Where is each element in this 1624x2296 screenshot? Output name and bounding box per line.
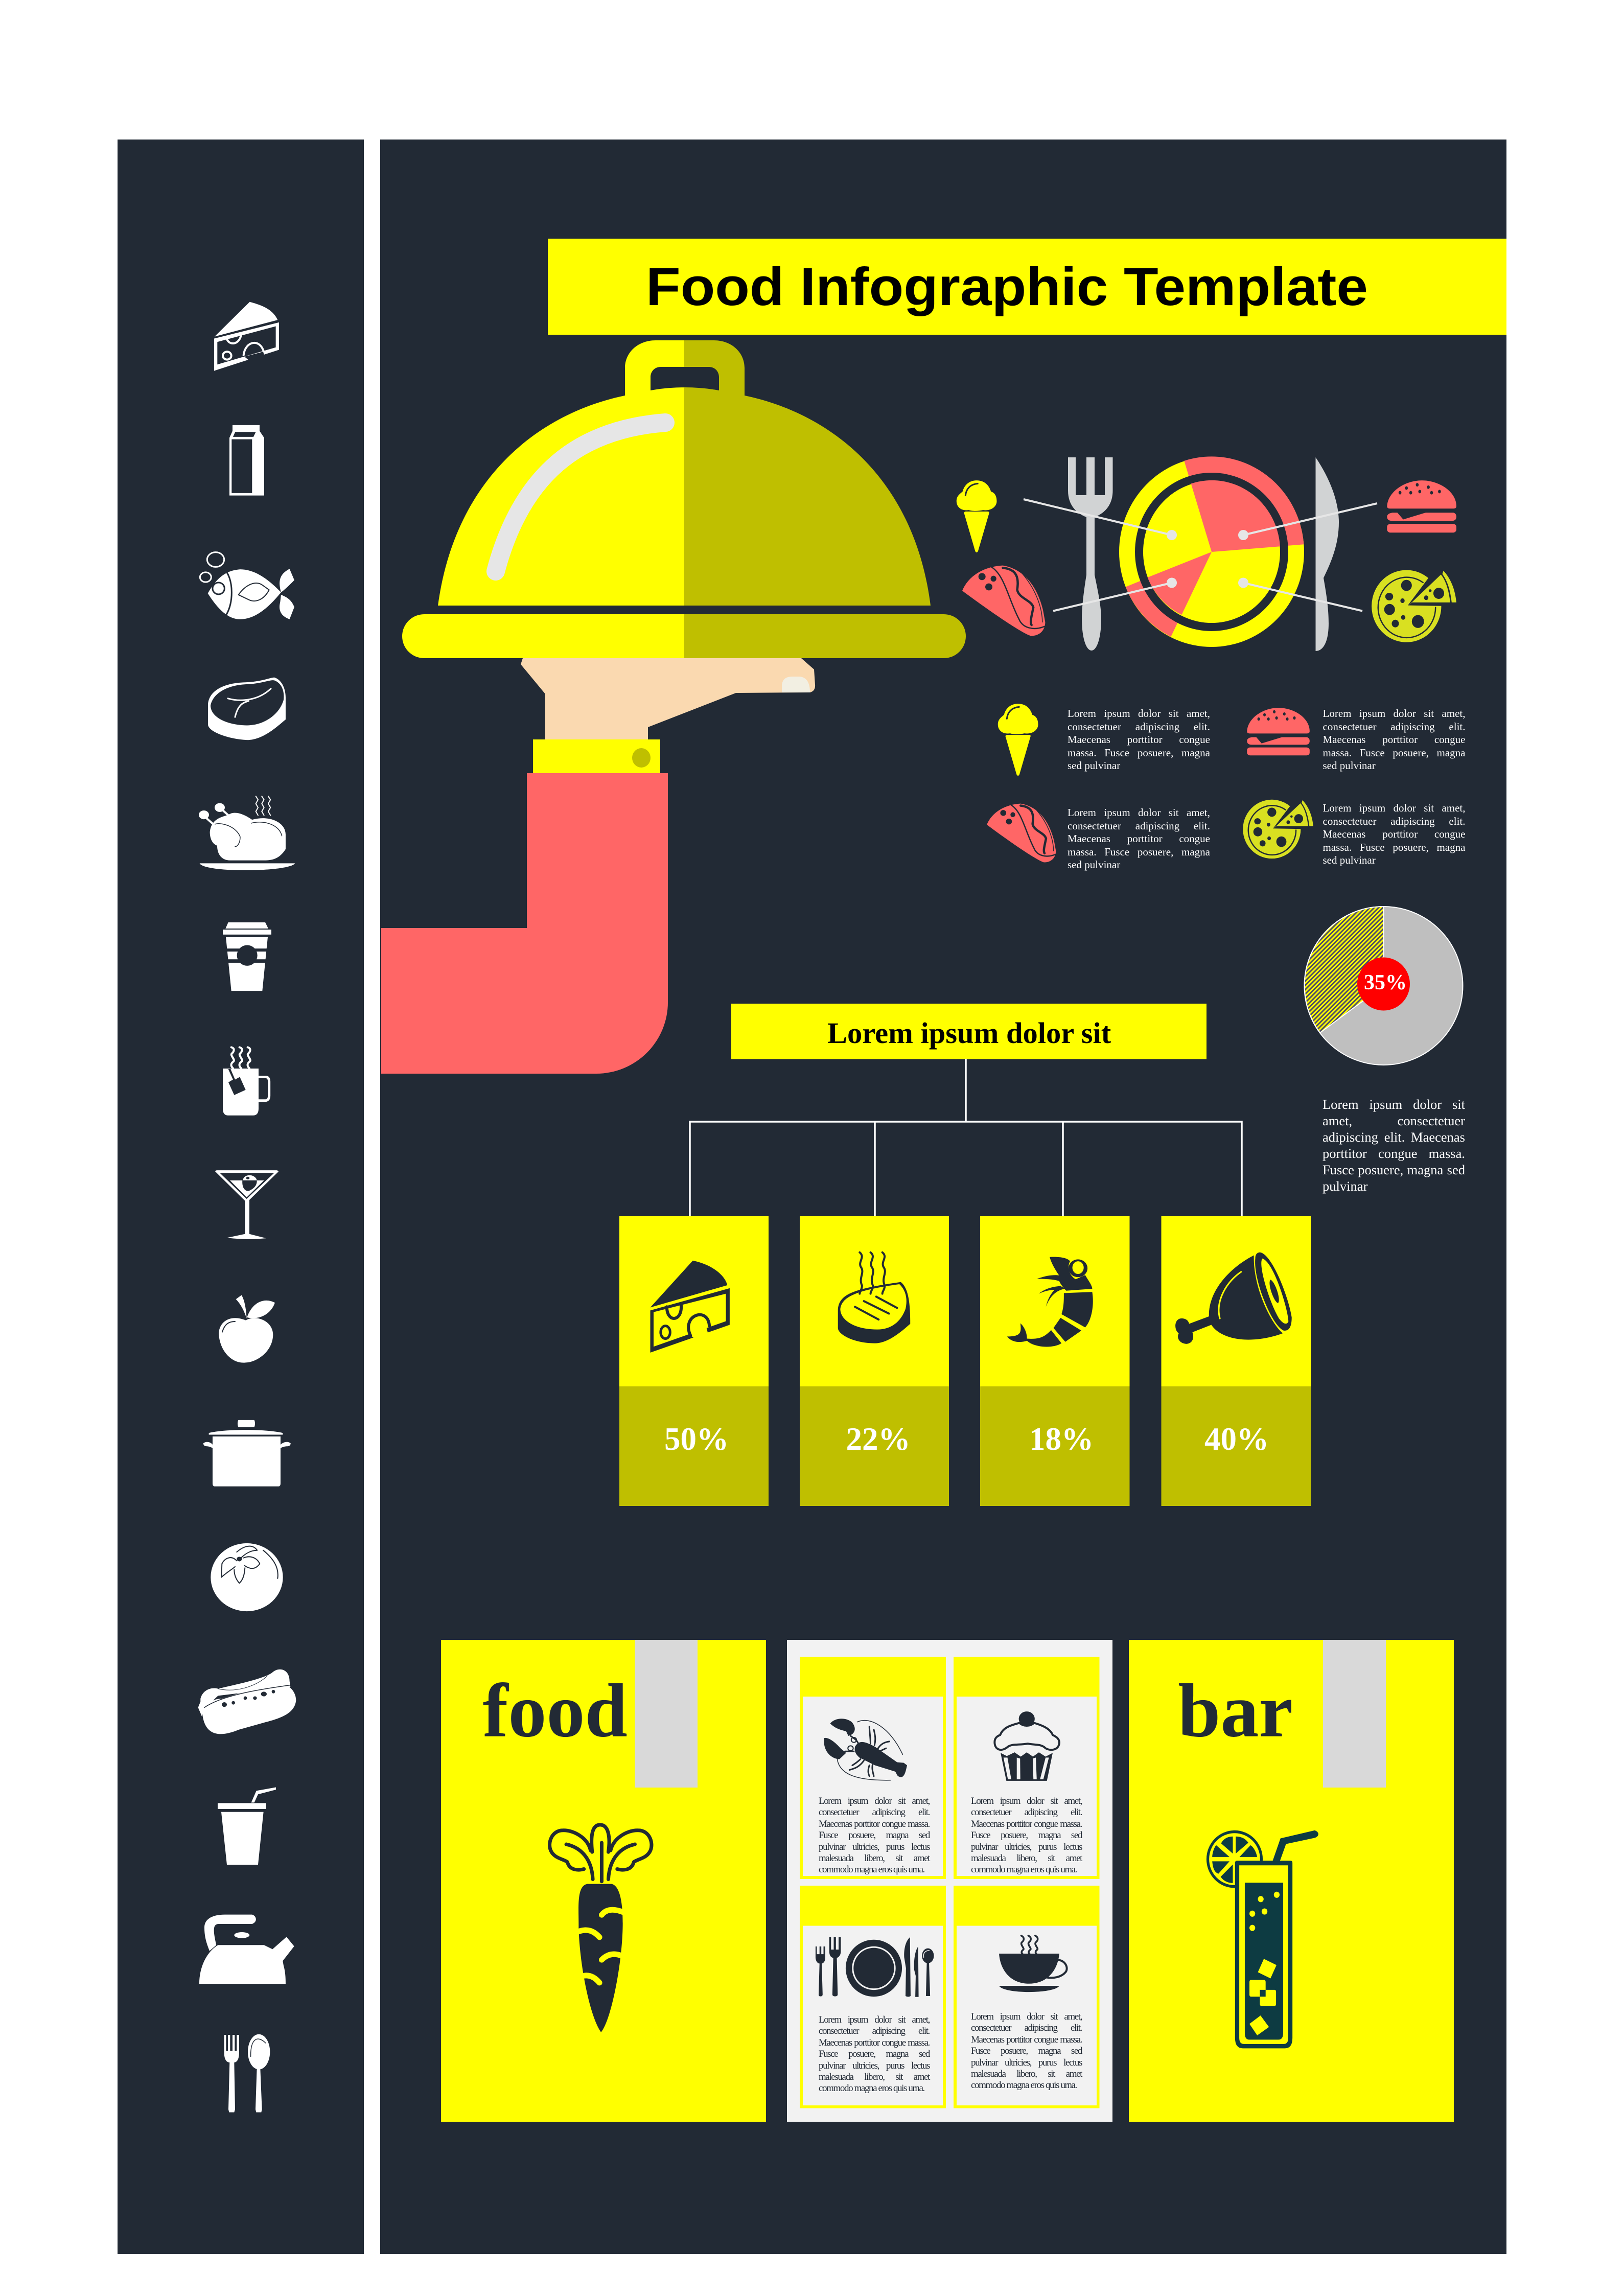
text: pie chart description: Lorem ipsum dolor sit — [1323, 1097, 1465, 1112]
text: menu card 4: consectetuer adipiscing elit. — [971, 2023, 1082, 2033]
icon: carrot — [550, 1825, 652, 2032]
text: menu card 4: pulvinar ultricies, purus lectus — [971, 2057, 1082, 2068]
text: menu card 4 — [971, 2011, 1082, 2091]
text: ice cream description — [1068, 707, 1210, 772]
pointer lines — [1024, 499, 1377, 611]
text: pie chart description: amet, consectetuer — [1323, 1113, 1465, 1128]
text: menu card 2: Lorem ipsum dolor sit amet, — [971, 1796, 1082, 1806]
text: pizza description: consectetuer adipiscing elit. — [1323, 815, 1466, 827]
icon: cupcake — [994, 1711, 1059, 1781]
text: menu card 4: commodo magna eros quis urna. — [971, 2080, 1077, 2091]
stat card: cheese 50% — [619, 1216, 769, 1506]
text: menu card 4: malesuada libero, sit amet — [971, 2069, 1082, 2079]
text: burger description: Maecenas porttitor congue — [1323, 733, 1466, 746]
fork — [1068, 457, 1113, 651]
text: menu card 2: consectetuer adipiscing elit. — [971, 1807, 1082, 1818]
icon: tea mug — [223, 1047, 269, 1116]
text: pizza description: Lorem ipsum dolor sit amet, — [1323, 802, 1466, 814]
text: menu card 1: malesuada libero, sit amet — [819, 1853, 930, 1864]
text: taco description — [1068, 806, 1210, 871]
knife — [1315, 457, 1339, 651]
stat card: shrimp 18%: 18% — [1029, 1421, 1094, 1457]
stat card: steak 22%: 22% — [846, 1421, 911, 1457]
icon: apple — [219, 1295, 275, 1363]
banner heading: Lorem ipsum dolor sit — [827, 1016, 1111, 1050]
icon: drink cup with straw — [218, 1787, 276, 1865]
text: pizza description: massa. Fusce posuere, magna — [1323, 841, 1466, 853]
panel: bar menu cover: bar — [1178, 1668, 1293, 1753]
panel: food menu cover — [441, 1640, 766, 2122]
sleeve — [381, 773, 668, 1074]
icon: lobster — [824, 1719, 907, 1780]
text: menu card 2: Maecenas porttitor congue massa. — [971, 1819, 1082, 1829]
text: burger description — [1323, 707, 1466, 772]
cloche dome — [438, 340, 931, 606]
icon: cheese — [650, 1261, 730, 1353]
text: menu card 2: pulvinar ultricies, purus lectus — [971, 1842, 1082, 1852]
legend icon: burger — [1247, 708, 1310, 755]
cuff — [533, 739, 660, 773]
title bar — [548, 239, 1506, 335]
text: pizza description: sed pulvinar — [1323, 854, 1376, 866]
icon: martini — [215, 1170, 279, 1239]
text: pie chart description: porttitor congue massa. — [1323, 1146, 1465, 1161]
icon: kettle — [199, 1915, 294, 1984]
icon: soup cup — [999, 1936, 1067, 1992]
icon: fish — [200, 552, 294, 619]
tree connector lines — [690, 1059, 1242, 1216]
text: burger description: massa. Fusce posuere, magna — [1323, 746, 1466, 758]
text: menu card 1: commodo magna eros quis urna. — [819, 1864, 924, 1875]
text: menu card 3: Maecenas porttitor congue massa. — [819, 2037, 930, 2048]
icon: milk carton — [229, 425, 264, 496]
text: menu card 2: commodo magna eros quis urna. — [971, 1864, 1077, 1875]
icon: cooking pot — [203, 1420, 291, 1487]
text: menu card 3 — [819, 2014, 930, 2094]
icon: fork and spoon — [224, 2034, 270, 2112]
text: ice cream description: Lorem ipsum dolor sit amet, — [1068, 707, 1210, 720]
stat card: cheese 50%: 50% — [664, 1421, 729, 1457]
text: taco description: consectetuer adipiscing elit. — [1068, 820, 1210, 832]
plate diagram — [957, 456, 1377, 651]
text: menu card 1: pulvinar ultricies, purus lectus — [819, 1842, 930, 1852]
text: menu card 1: Maecenas porttitor congue massa. — [819, 1819, 930, 1829]
plate pie chart — [1143, 480, 1280, 623]
dome highlight — [496, 423, 665, 571]
stat card: ham 40% — [1161, 1216, 1311, 1506]
text: menu card 3: consectetuer adipiscing elit. — [819, 2026, 930, 2036]
text: ice cream description: massa. Fusce posuere, magna — [1068, 746, 1210, 758]
text: menu card 1: consectetuer adipiscing elit. — [819, 1807, 930, 1818]
text: pie chart description: adipiscing elit. Maecenas — [1323, 1129, 1465, 1145]
text: menu card 1: Lorem ipsum dolor sit amet, — [819, 1796, 930, 1806]
icon: coffee cup — [223, 922, 271, 991]
panel: food menu cover: food — [482, 1668, 628, 1753]
text: burger description: Lorem ipsum dolor sit amet, — [1323, 707, 1466, 720]
text: ice cream description: consectetuer adipiscing elit. — [1068, 721, 1210, 733]
text: menu card 4: Lorem ipsum dolor sit amet, — [971, 2011, 1082, 2022]
text: menu card 3: malesuada libero, sit amet — [819, 2072, 930, 2082]
cloche tray — [402, 614, 966, 658]
icon: place setting — [816, 1937, 934, 1997]
stat card: steak 22% — [800, 1216, 949, 1506]
stat card: shrimp 18% — [980, 1216, 1129, 1506]
icon: steak with steam — [838, 1253, 910, 1343]
panel: menu interior — [787, 1640, 1112, 2122]
icon: burger — [1387, 480, 1456, 532]
icon: ice cream — [957, 480, 996, 552]
text: menu card 2: malesuada libero, sit amet — [971, 1853, 1082, 1864]
icon: steak — [208, 678, 286, 740]
text: burger description: sed pulvinar — [1323, 759, 1376, 772]
plate rim — [1119, 456, 1304, 647]
icon: cocktail glass — [1207, 1830, 1318, 2048]
panel: bar menu cover — [1129, 1640, 1454, 2122]
text: burger description: consectetuer adipiscing elit. — [1323, 721, 1466, 733]
banner heading — [731, 1004, 1207, 1059]
text: taco description: sed pulvinar — [1068, 859, 1120, 871]
hand — [521, 658, 815, 739]
text: menu card 2 — [971, 1796, 1082, 1875]
icon: shrimp — [1007, 1257, 1093, 1347]
icon: tomato — [211, 1543, 283, 1611]
stat card: ham 40%: 40% — [1204, 1421, 1269, 1457]
legend icon: ice cream — [998, 704, 1038, 776]
text: ice cream description: Maecenas porttitor congue — [1068, 733, 1210, 746]
menu card 4 — [954, 1886, 1100, 2108]
icon: cheese — [214, 302, 279, 371]
illustration: waiter's arm holding cloche — [381, 340, 966, 1074]
icon: pizza — [1372, 570, 1456, 642]
text: taco description: Lorem ipsum dolor sit amet, — [1068, 806, 1210, 819]
legend icon: taco — [987, 804, 1056, 862]
text: menu card 1: Fusce posuere, magna sed — [819, 1830, 930, 1841]
icon: hot dog — [198, 1669, 296, 1734]
text: pizza description — [1323, 802, 1466, 866]
text: menu card 1 — [819, 1796, 930, 1875]
text: pizza description: Maecenas porttitor congue — [1323, 828, 1466, 840]
icon: taco — [962, 566, 1045, 636]
text: menu card 4: Maecenas porttitor congue massa. — [971, 2034, 1082, 2045]
text: ice cream description: sed pulvinar — [1068, 759, 1120, 772]
pie chart 35%: 35% — [1364, 971, 1407, 994]
legend icon: pizza — [1243, 800, 1313, 859]
menu card 1 — [800, 1657, 946, 1879]
menu card 2 — [954, 1657, 1100, 1879]
text: pie chart description: pulvinar — [1323, 1178, 1367, 1194]
icon: roast chicken — [199, 796, 295, 870]
text: menu card 4: Fusce posuere, magna sed — [971, 2046, 1082, 2056]
text: menu card 2: Fusce posuere, magna sed — [971, 1830, 1082, 1841]
panel: main dark background — [380, 140, 1506, 2254]
text: pie chart description: Fusce posuere, magna sed — [1323, 1162, 1465, 1177]
panel: sidebar with food icons — [118, 140, 364, 2254]
menu card 3 — [800, 1886, 946, 2108]
text: menu card 3: commodo magna eros quis urna. — [819, 2083, 924, 2094]
text: menu card 3: pulvinar ultricies, purus lectus — [819, 2060, 930, 2071]
pie chart 35% — [1304, 907, 1463, 1065]
text: taco description: Maecenas porttitor congue — [1068, 832, 1210, 845]
title: Food Infographic Template — [646, 257, 1368, 317]
text: menu card 3: Lorem ipsum dolor sit amet, — [819, 2014, 930, 2025]
text: menu card 3: Fusce posuere, magna sed — [819, 2049, 930, 2059]
icon: ham — [1175, 1253, 1292, 1344]
text: taco description: massa. Fusce posuere, magna — [1068, 845, 1210, 857]
text: pie chart description — [1323, 1097, 1465, 1194]
